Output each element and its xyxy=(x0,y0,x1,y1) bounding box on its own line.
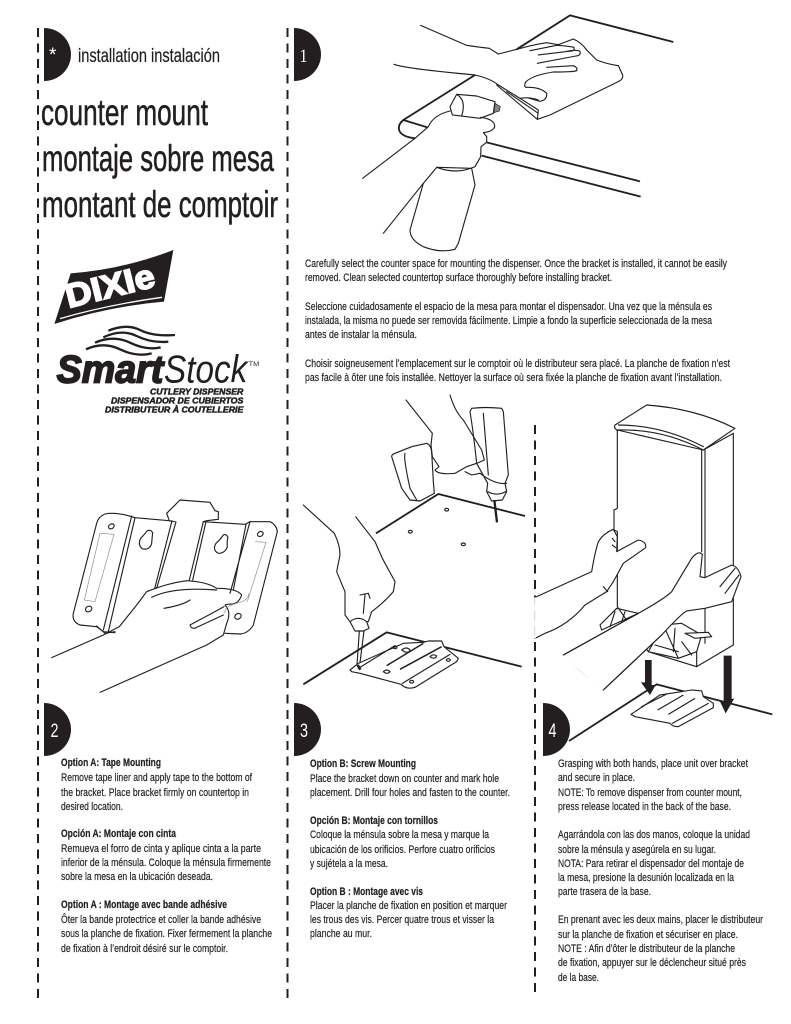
logo: Dixie badge: DIXIe xyxy=(62,258,159,316)
logo: SmartStock wordmark xyxy=(57,348,259,392)
logo: SmartStock wordmark: Smart xyxy=(57,348,165,392)
text: step 3 instructions: placement. Drill four holes and fasten to the counter. xyxy=(310,787,510,799)
title: counter mount in three languages: montaje sobre mesa xyxy=(42,138,274,179)
text: step 3 instructions: y sujétela a la mesa. xyxy=(310,858,388,870)
text: step 3 instructions: ubicación de los orificios. Perfore cuatro orificios xyxy=(310,844,495,856)
heading: installation: installation instalación xyxy=(78,46,220,67)
text: step 3 instructions: Place the bracket down on counter and mark hole xyxy=(310,773,499,785)
text: step 3 instructions: les trous des vis. Percer quatre trous et visser la xyxy=(310,914,495,926)
logo: Dixie SmartStock xyxy=(54,250,259,414)
text: step 3 instructions: planche au mur. xyxy=(310,928,372,940)
text: step 3 instructions: Coloque la ménsula sobre la mesa y marque la xyxy=(310,829,490,841)
text: step 2 instructions: inferior de la ménsula. Coloque la ménsula firmemente xyxy=(61,857,271,869)
text: step 2 instructions: the bracket. Place bracket firmly on countertop in xyxy=(61,787,249,799)
logo: SmartStock waves xyxy=(86,327,175,355)
text: step 3 instructions: Option B : Montage avec vis xyxy=(310,886,423,898)
text: step 2 instructions: sous la planche de fixation. Fixer fermement la planche xyxy=(61,928,272,940)
text: step 2 instructions: desired location. xyxy=(61,801,123,813)
illustration: hands cleaning counter with spray bottle xyxy=(363,15,673,251)
text: step 2 instructions: de fixation à l’endroit désiré sur le comptoir. xyxy=(61,943,228,955)
illustration: drilling and screwing bracket xyxy=(303,395,525,688)
logo: SmartStock wordmark: Stock xyxy=(164,348,249,392)
marker: step 4: 4 xyxy=(548,721,557,742)
text: step 2 instructions: Remueva el forro de cinta y aplique cinta a la parte xyxy=(61,843,261,855)
text: step 2 instructions: Ôter la bande protectrice et coller la bande adhésive xyxy=(61,913,261,926)
text: step 4 instructions: de la base. xyxy=(558,972,599,984)
text: step 4 instructions: sur la planche de fixation et sécuriser en place. xyxy=(558,929,738,941)
illustration: hand pressing tape bracket xyxy=(52,500,277,692)
text: step 2 instructions: Option A : Montage avec bande adhésive xyxy=(61,899,227,911)
marker: step 3 xyxy=(294,703,321,756)
marker: asterisk section tab: * xyxy=(49,45,57,66)
marker: step 2 xyxy=(44,703,71,756)
text: step 4 instructions: press release located in the back of the base. xyxy=(558,801,731,813)
logo: product descriptor: CUTLERY DISPENSER xyxy=(150,386,244,396)
text: step 4 instructions xyxy=(558,758,763,984)
text: step 4 instructions: sobre la ménsula y asegúrela en su lugar. xyxy=(558,844,716,856)
text: step 2 instructions xyxy=(61,757,272,955)
marker: step 1: 1 xyxy=(300,46,308,67)
text: step 2 instructions: Opción A: Montaje con cinta xyxy=(61,828,177,840)
logo: product descriptor: DISTRIBUTEUR À COUTELLERIE xyxy=(105,404,244,414)
title: counter mount in three languages: counter mount xyxy=(41,92,209,133)
marker: step 4 xyxy=(543,703,570,756)
text: step 3 instructions xyxy=(310,758,510,940)
text: step 1 instructions xyxy=(305,258,731,384)
marker: step 2: 2 xyxy=(50,721,58,742)
marker: step 3: 3 xyxy=(300,721,308,742)
text: step 3 instructions: Option B: Screw Mounting xyxy=(310,758,416,770)
text: step 4 instructions: and secure in place. xyxy=(558,772,635,784)
title: counter mount in three languages xyxy=(41,92,278,225)
text: step 2 instructions: Option A: Tape Mounting xyxy=(61,757,161,769)
marker: asterisk section tab xyxy=(44,28,71,81)
logo: product descriptor: DISPENSADOR DE CUBIERTOS xyxy=(111,395,244,405)
marker: step 1 xyxy=(294,28,321,81)
text: step 4 instructions: la mesa, presione la desunión localizada en la xyxy=(558,872,735,884)
text: step 1 instructions: removed. Clean selected countertop surface thoroughly before installing bracket. xyxy=(305,272,612,284)
title: counter mount in three languages: montant de comptoir xyxy=(42,184,278,225)
illustration: placing dispenser over bracket xyxy=(535,405,772,741)
text: step 2 instructions: Remove tape liner and apply tape to the bottom of xyxy=(61,772,253,784)
logo: SmartStock wordmark: TM xyxy=(249,361,259,368)
text: step 4 instructions: parte trasera de la base. xyxy=(558,886,651,898)
text: step 2 instructions: sobre la mesa en la ubicación deseada. xyxy=(61,871,213,883)
text: step 4 instructions: NOTE : Afin d’ôter le distributeur de la planche xyxy=(558,943,735,955)
logo: Dixie badge xyxy=(54,250,173,324)
text: step 1 instructions: antes de instalar la ménsula. xyxy=(305,329,417,341)
text: step 3 instructions: Placer la planche de fixation en position et marquer xyxy=(310,900,507,912)
text: step 3 instructions: Opción B: Montaje con tornillos xyxy=(310,815,438,827)
logo: product descriptor xyxy=(105,386,244,414)
